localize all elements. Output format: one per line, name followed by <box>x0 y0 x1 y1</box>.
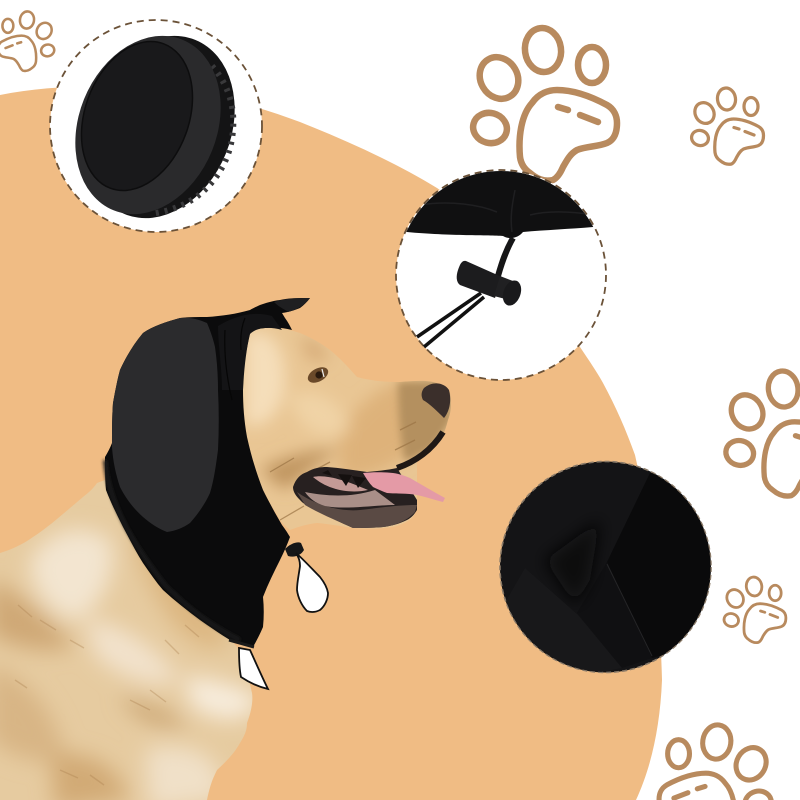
dog mouth <box>293 467 445 528</box>
dog nose <box>422 383 450 418</box>
paw print: right lower <box>723 576 786 643</box>
fur strokes <box>15 605 199 785</box>
fold highlight <box>607 564 652 656</box>
centre shadow <box>548 528 598 598</box>
detail circle: fabric texture <box>495 462 720 680</box>
lower cords <box>417 293 484 347</box>
cup inner disc <box>62 26 212 206</box>
ear flap tip <box>274 298 310 312</box>
paw print: large top <box>470 26 617 181</box>
elastic gathered band <box>218 314 282 390</box>
dog head <box>243 328 451 530</box>
muzzle shading <box>398 380 452 462</box>
ear cup patch <box>112 318 219 532</box>
palate <box>313 476 368 491</box>
lower white loop <box>239 648 268 689</box>
cup ribbed side <box>59 13 261 241</box>
upper cord <box>498 238 513 276</box>
paw print: right upper <box>690 87 764 164</box>
dog <box>0 320 460 800</box>
paw print: top left <box>0 11 56 71</box>
dog body <box>0 470 270 800</box>
lower left band <box>506 600 603 672</box>
gum <box>305 490 395 508</box>
mouth dark <box>293 467 417 528</box>
cup front rim <box>50 14 246 236</box>
dark fold right <box>608 472 710 658</box>
paw print: right middle <box>723 369 800 496</box>
lip line <box>397 432 443 468</box>
teeth <box>322 470 366 488</box>
paw print: bottom right <box>659 723 774 800</box>
lower lip <box>297 492 417 528</box>
hood bottom cord <box>229 640 254 647</box>
fabric top <box>406 171 594 238</box>
tongue <box>363 472 445 502</box>
white loop <box>296 553 328 612</box>
toggle body <box>457 261 502 298</box>
black hood <box>105 298 328 689</box>
detail circle: ear cup <box>50 13 262 241</box>
toggle cap <box>494 276 513 300</box>
dog eye <box>305 364 331 386</box>
outer side strap <box>105 460 240 640</box>
middle fold <box>577 562 652 668</box>
jaw fur streaks <box>270 422 416 520</box>
drawstring toggle on hood <box>285 542 304 557</box>
orange background blob <box>0 86 662 800</box>
detail circle: drawstring toggle <box>395 165 610 380</box>
